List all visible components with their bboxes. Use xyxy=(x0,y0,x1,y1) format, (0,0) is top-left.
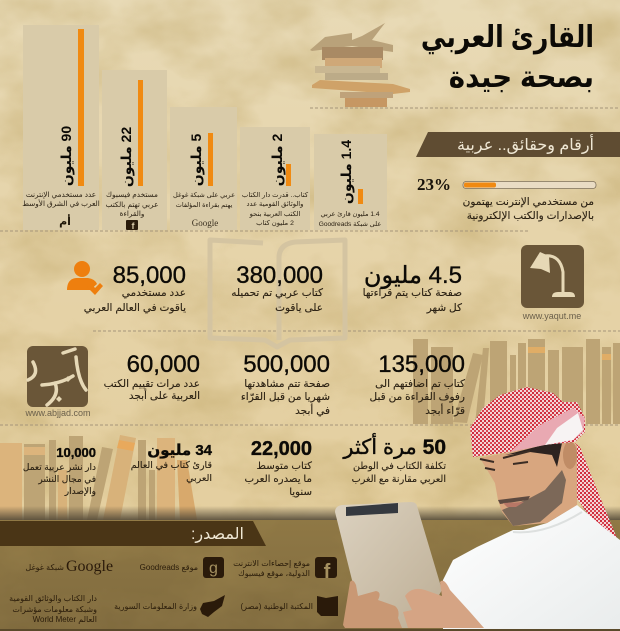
stat: 34 million: العربي xyxy=(186,473,212,484)
stat: 60,000 ratings: عدد مرات تقييم الكتب xyxy=(104,378,200,390)
source: google: شبكة غوغل xyxy=(25,563,64,572)
bottom edge strip xyxy=(0,629,620,631)
bar chart: readers numbers xyxy=(22,25,387,231)
section banner: numbers and facts: أرقام وحقائق.. عربية xyxy=(457,134,594,155)
bar panel: 2 million xyxy=(240,127,310,230)
title: بصحة جيدة xyxy=(449,61,594,94)
source: google xyxy=(25,558,113,575)
bar panel: 22 million: مستخدم فيسبوك xyxy=(106,190,158,199)
bar panel: 90 million: أم xyxy=(59,214,71,228)
stat: 85,000 users xyxy=(84,262,186,314)
icon: open book outline xyxy=(210,240,345,347)
bar panel: 90 million xyxy=(22,25,100,230)
source: syrian ministry: وزارة المعلومات السورية xyxy=(114,602,197,611)
stat: 60,000 ratings: 60,000 xyxy=(127,351,200,378)
title xyxy=(421,20,594,94)
beard xyxy=(502,470,566,526)
stat: 500,000 pages: 500,000 xyxy=(243,351,330,378)
icon: abjjad logo: www.abjjad.com xyxy=(24,408,91,418)
source: national archive and world meter: العالم World Meter xyxy=(33,615,97,624)
bar panel: 90 million: 90 مليون xyxy=(58,126,75,186)
bar panel: 2 million: 2 مليون xyxy=(269,134,286,186)
stat: 135,000 books xyxy=(370,351,465,417)
icon: lamp, yaqut: www.yaqut.me xyxy=(522,311,581,321)
right eyebrow and eye xyxy=(503,451,530,464)
bar panel: 5 million xyxy=(170,107,237,230)
bar panel: 22 million: عربي تهتم بالكتب xyxy=(106,200,158,209)
stat: 10,000 publishers: 10,000 xyxy=(56,445,96,460)
white thobe xyxy=(443,505,620,631)
source: national archive and world meter xyxy=(9,594,97,624)
stat: 500,000 pages: في أبجد xyxy=(295,403,330,417)
stat: 60,000 ratings xyxy=(104,351,200,402)
headscarf tail xyxy=(570,443,617,538)
neck and face xyxy=(480,440,577,526)
progress stat: 23 percent: من مستخدمي الإنترنت يهتمون xyxy=(463,196,594,208)
progress stat: 23 percent: 23% xyxy=(417,175,451,194)
bar panel: 22 million: f xyxy=(132,221,136,231)
ear xyxy=(563,441,577,469)
stat: 380,000 books: 380,000 xyxy=(236,262,323,289)
source: facebook: f xyxy=(324,561,331,583)
bar panel: 2 million: 2 مليون كتاب xyxy=(256,219,294,227)
bar panel: 22 million xyxy=(102,70,167,231)
footer banner: المصدر: xyxy=(191,526,244,544)
icon: abjjad logo xyxy=(24,346,91,418)
hair xyxy=(505,443,562,467)
progress stat: 23 percent xyxy=(417,175,596,222)
title: القارئ العربي xyxy=(421,20,594,55)
icon: user with check xyxy=(67,261,103,295)
bar panel: 90 million: عدد مستخدمي الإنترنت xyxy=(26,190,96,199)
stat: 50 times more xyxy=(342,433,446,485)
bar panel: 90 million: العرب في الشرق الأوسط xyxy=(22,199,100,208)
lips xyxy=(503,502,524,507)
source: national library egypt: المكتبة الوطنية (مصر) xyxy=(240,602,313,611)
bar panel: 1.4 million: على شبكة Goodreads xyxy=(319,220,381,228)
decorative dashed separators xyxy=(0,108,620,425)
source: facebook: الدولية، موقع فيسبوك xyxy=(238,569,310,578)
stat: 34 million: قارئ كتاب في العالم xyxy=(131,460,212,471)
bar panel: 2 million: الكتب العربية بنحو xyxy=(249,210,300,218)
bar panel: 1.4 million xyxy=(314,134,387,230)
source: goodreads: g xyxy=(209,560,218,577)
stat: 22,000 books: سنويا xyxy=(289,487,312,498)
stat: 4.5 million pages: كل شهر xyxy=(426,302,462,314)
tablet camera bar xyxy=(346,503,398,516)
source: facebook xyxy=(233,557,337,583)
source: syrian ministry xyxy=(114,595,225,617)
stat: 34 million: 34 مليون xyxy=(147,442,213,459)
stat: 50 times more: العربي مقارنة مع الغرب xyxy=(352,474,446,485)
stat: 10,000 publishers xyxy=(23,445,96,497)
stat: 50 times more: 50 مرة أكثر xyxy=(342,433,446,459)
stat: 135,000 books: كتاب تم اضافتهم الى xyxy=(375,378,465,390)
bar panel: 5 million: عربي على شبكة غوغل xyxy=(173,191,235,199)
stat: 4.5 million pages: 4.5 مليون xyxy=(364,262,462,289)
stat: 34 million xyxy=(131,442,213,484)
moustache xyxy=(498,496,530,504)
right hand xyxy=(403,581,484,628)
stat: 10,000 publishers: دار نشر عربية تعمل xyxy=(23,462,96,472)
left eyebrow and eye xyxy=(480,459,495,470)
stat: 500,000 pages: صفحة تتم مشاهدتها xyxy=(244,378,330,390)
headscarf pink fold xyxy=(510,408,585,452)
source: national archive and world meter: دار الكتاب والوثائق القومية xyxy=(9,594,97,603)
illustration: bookshelf right xyxy=(413,339,620,424)
stat: 380,000 books: على ياقوت xyxy=(275,302,323,314)
illustration: stack of books xyxy=(310,23,410,107)
collar shading xyxy=(513,512,582,532)
headscarf xyxy=(470,387,585,457)
source: google: Google xyxy=(66,558,113,575)
stat: 4.5 million pages: صفحة كتاب يتم قراءتها xyxy=(363,287,462,299)
tablet xyxy=(335,502,442,628)
bar panel: 2 million: كتاب.. قدرت دار الكتاب xyxy=(242,191,309,199)
stat: 60,000 ratings: العربية على أبجد xyxy=(129,388,200,402)
bar panel: 5 million: Google xyxy=(192,218,218,228)
source: facebook: موقع إحصاءات الانترنت xyxy=(233,559,310,569)
left hand xyxy=(343,581,402,628)
stat: 500,000 pages: شهريا من قبل القرّاء xyxy=(241,391,330,403)
stat: 380,000 books xyxy=(231,262,323,314)
stat: 85,000 users: عدد مستخدمي xyxy=(122,287,186,299)
section banner: numbers and facts xyxy=(416,132,620,157)
source: goodreads xyxy=(140,557,224,578)
stat: 500,000 pages xyxy=(241,351,330,417)
source: national library egypt xyxy=(240,596,338,616)
bar panel: 1.4 million: 1.4 مليون قارئ عربي xyxy=(320,211,380,218)
stat: 4.5 million pages xyxy=(363,262,462,314)
bar panel: 1.4 million: 1.4 مليون xyxy=(338,140,355,204)
headscarf white fold xyxy=(545,413,583,445)
stat: 22,000 books: 22,000 xyxy=(251,438,312,460)
stat: 85,000 users: 85,000 xyxy=(113,262,186,289)
progress stat: 23 percent: بالإصدارات والكتب الإلكترونية xyxy=(467,210,594,222)
stat: 22,000 books: كتاب متوسط xyxy=(257,461,312,472)
bar panel: 2 million: والوثائق القومية عدد xyxy=(247,201,303,208)
stat: 135,000 books: رفوف القراءة من قبل xyxy=(370,391,465,403)
stat: 85,000 users: ياقوت في العالم العربي xyxy=(84,302,186,314)
stat: 10,000 publishers: في مجال النشر xyxy=(37,474,96,484)
stat: 135,000 books: 135,000 xyxy=(378,351,465,378)
bar panel: 5 million: 5 مليون xyxy=(188,134,205,186)
source: goodreads: موقع Goodreads xyxy=(140,563,198,572)
stat: 135,000 books: قرّاء أبجد xyxy=(425,403,465,417)
bar panel: 5 million: يهتم بقراءة المؤلفات xyxy=(176,202,233,209)
stat: 380,000 books: كتاب عربي تم تحميله xyxy=(231,287,323,299)
stat: 22,000 books xyxy=(244,438,312,498)
icon: lamp, yaqut xyxy=(521,245,584,321)
footer banner xyxy=(0,521,266,546)
illustration: bookshelf left xyxy=(0,435,197,521)
photo: reader with tablet xyxy=(335,387,620,631)
bar panel: 22 million: 22 مليون xyxy=(118,127,135,187)
source: national archive and world meter: وشبكة معلومات مؤشرات xyxy=(12,605,97,614)
stat: 50 times more: تكلفة الكتاب في الوطن xyxy=(353,461,446,472)
stat: 22,000 books: ما يصدره العرب xyxy=(244,474,312,485)
stat: 10,000 publishers: والإصدار xyxy=(64,486,96,497)
footer panel: sources xyxy=(0,506,620,631)
bar panel: 22 million: والقراءة xyxy=(120,209,144,218)
